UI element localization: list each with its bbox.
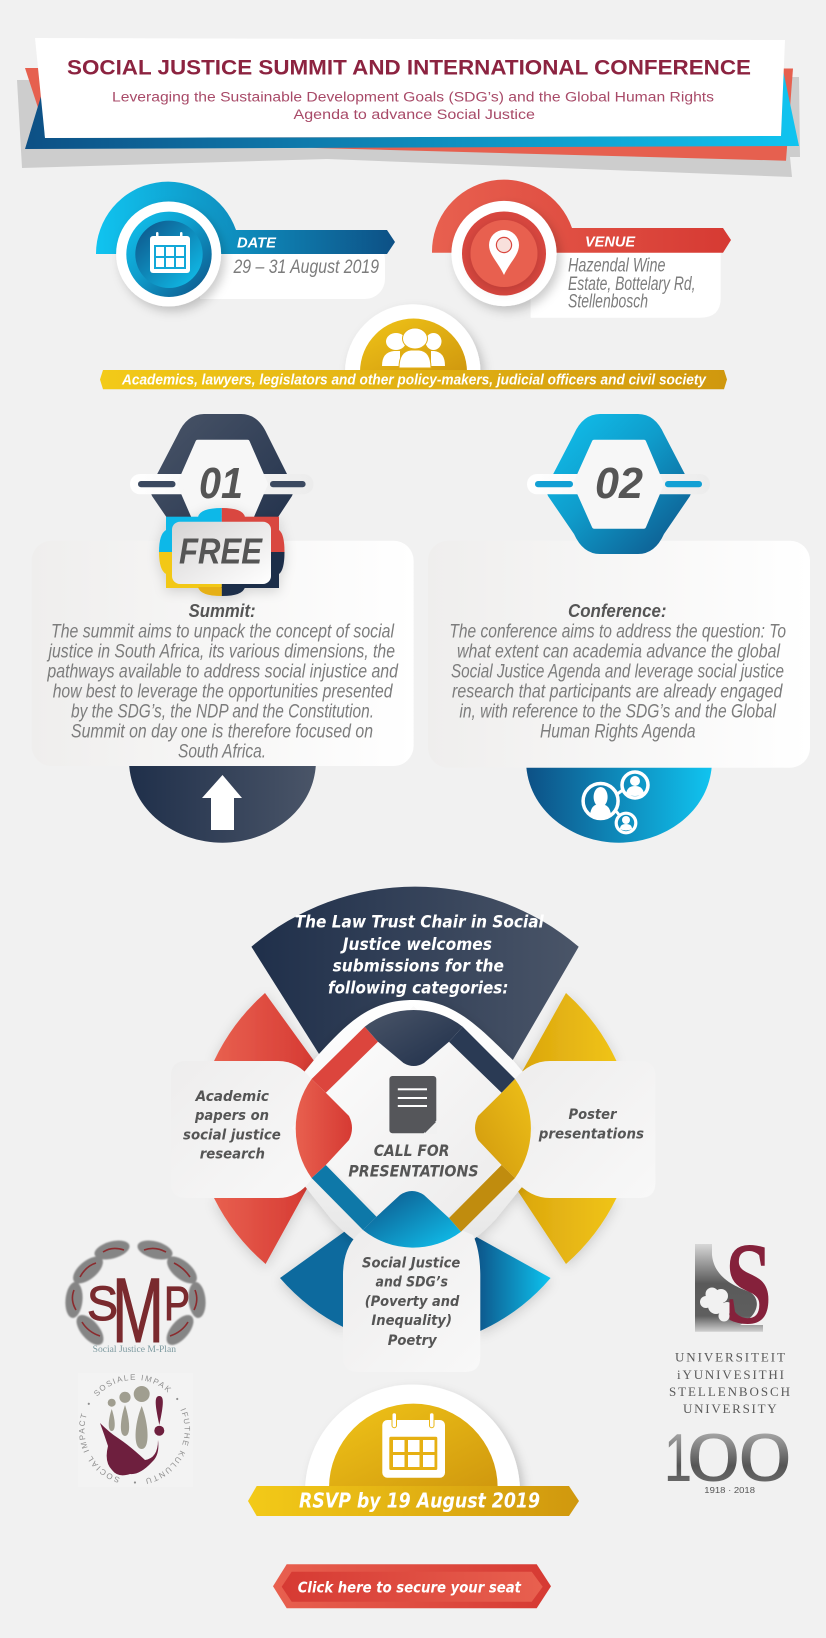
icon: calendar (150, 232, 190, 273)
university name: UNIVERSITEIT (675, 1350, 785, 1365)
subtitle (112, 90, 714, 122)
summit heading: Summit: (189, 601, 256, 621)
subtitle: Agenda to advance Social Justice (294, 107, 535, 122)
icon: calendar (382, 1413, 445, 1478)
summit body text: The summit aims to unpack the concept of social (51, 622, 395, 642)
wheel heading: following categories: (328, 978, 508, 998)
poetry card (343, 1230, 480, 1372)
header banner (17, 38, 800, 177)
hexagon 01 (150, 414, 294, 554)
ring cap: blue (363, 1191, 461, 1248)
inner diamond (292, 1006, 536, 1250)
rsvp text: RSVP by 19 August 2019 (299, 1489, 540, 1513)
panel: venue (432, 180, 731, 318)
date label: DATE (237, 234, 277, 252)
wheel heading: The Law Trust Chair in Social (295, 912, 545, 932)
number 01: 01 (199, 459, 243, 508)
poetry card: Inequality) (371, 1313, 452, 1329)
panel: date (96, 182, 395, 306)
summit card (32, 541, 414, 766)
academic papers card: Academic (195, 1089, 269, 1105)
navy sector (251, 887, 579, 1060)
title: SOCIAL JUSTICE SUMMIT AND INTERNATIONAL CONFERENCE (67, 54, 751, 80)
poster presentations card: presentations (538, 1126, 644, 1142)
call for presentations label (348, 1141, 479, 1181)
panel: conference (428, 414, 810, 843)
panel: summit (32, 414, 414, 843)
audience text: Academics, lawyers, legislators and other policy-makers, judicial officers and civil society (121, 372, 707, 388)
icon: map pin (489, 230, 519, 275)
poetry card: (Poverty and (365, 1294, 460, 1310)
panel: audience (100, 304, 727, 389)
logo: Social Justice M-Plan: Social Justice M-Plan (93, 1345, 176, 1355)
date text: 29 – 31 August 2019 (233, 257, 379, 278)
conference card (428, 541, 810, 768)
call for presentations label: CALL FOR (374, 1141, 450, 1160)
poetry card: Poetry (388, 1333, 437, 1349)
logo: Social Impact: SOCIAL IMPACT • SOSIALE IMPAK • IFUTHE KULUNTU • (79, 1374, 190, 1484)
red sectors (214, 993, 316, 1264)
gold sectors (515, 993, 616, 1264)
number 02: 02 (595, 459, 644, 508)
crest (695, 1218, 772, 1349)
logo: Social Justice M-Plan: S (87, 1278, 118, 1331)
ring cap: navy (365, 1010, 463, 1066)
outer diamond (258, 1000, 570, 1262)
summit body text: by the SDG’s, the NDP and the Constitution. (71, 702, 374, 722)
summit body text: Summit on day one is therefore focused on (71, 722, 373, 742)
panel: rsvp (248, 1384, 579, 1516)
hexagon 02 (546, 414, 692, 554)
wheel heading (295, 912, 545, 998)
academic papers card: papers on (194, 1108, 269, 1124)
panel: call for presentations wheel (171, 887, 655, 1372)
button: secure your seat (273, 1564, 551, 1608)
poster presentations card (515, 1061, 655, 1198)
venue text: Stellenbosch (568, 292, 648, 313)
crest: S (725, 1218, 772, 1349)
call for presentations label: PRESENTATIONS (348, 1162, 479, 1181)
summit body text: justice in South Africa, its various dimensions, the (46, 642, 395, 662)
academic papers card (171, 1061, 311, 1198)
summit body text: South Africa. (178, 742, 266, 762)
summit body text: how best to leverage the opportunities presented (53, 682, 394, 702)
conference heading: Conference: (568, 601, 666, 621)
ring bands (312, 1027, 515, 1232)
university name: STELLENBOSCH (669, 1384, 790, 1399)
logo: Social Justice M-Plan: P (164, 1278, 190, 1331)
bottom half-circle with arrow (129, 760, 316, 843)
university name: iYUNIVESITHI (677, 1367, 784, 1382)
centenary mark: 0 (738, 1420, 792, 1496)
blue sectors (280, 1228, 551, 1332)
icon: people (382, 328, 445, 368)
conference body text: Human Rights Agenda (540, 722, 696, 742)
centenary mark: 0 (686, 1420, 740, 1496)
logo: Social Justice M-Plan: M (112, 1260, 164, 1362)
logo: Social Justice M-Plan (64, 1237, 207, 1362)
university name (669, 1350, 790, 1416)
wheel heading: Justice welcomes (340, 935, 492, 955)
free badge: FREE (179, 530, 263, 571)
bottom half-circle (526, 760, 712, 843)
icon: network (583, 772, 648, 833)
poetry card: and SDG’s (376, 1275, 448, 1291)
ring cap: gold (475, 1079, 531, 1178)
poetry card: Social Justice (362, 1256, 460, 1272)
university name: UNIVERSITY (683, 1401, 777, 1416)
venue text: Hazendal Wine (568, 256, 666, 276)
button: secure your seat: Click here to secure your seat (298, 1578, 522, 1596)
summit body text (46, 622, 399, 762)
logo: Stellenbosch University (664, 1218, 792, 1496)
conference body text (449, 622, 786, 742)
ring cap: red (296, 1079, 352, 1178)
centenary mark: 1918 · 2018 (704, 1485, 755, 1495)
centenary mark (664, 1420, 792, 1496)
icon: document (389, 1076, 437, 1134)
academic papers card: social justice (183, 1127, 281, 1143)
venue label: VENUE (585, 234, 636, 250)
subtitle: Leveraging the Sustainable Development Goals (SDG’s) and the Global Human Rights (112, 90, 714, 104)
poster presentations card: Poster (568, 1107, 617, 1123)
free badge (159, 508, 284, 596)
wheel heading: submissions for the (333, 957, 504, 977)
venue text (568, 256, 696, 313)
centenary mark: 1 (664, 1420, 692, 1496)
summit body text: pathways available to address social injustice and (47, 662, 399, 682)
academic papers card: research (200, 1146, 265, 1162)
venue text: Estate, Bottelary Rd, (568, 274, 696, 295)
